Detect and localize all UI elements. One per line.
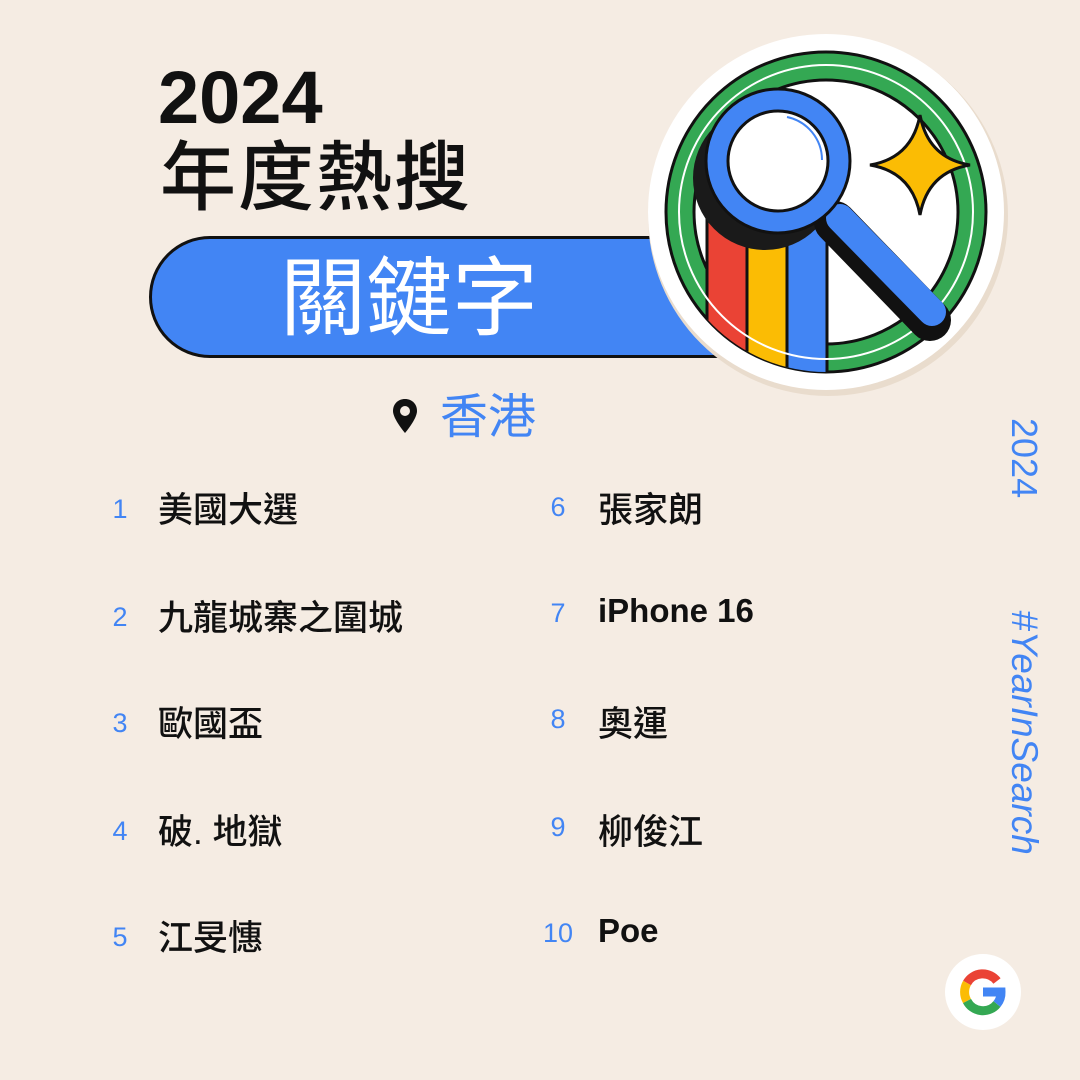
title: 年度熱搜: 年度熱搜 [160,136,472,221]
list column 1: 歐國盃 [158,705,263,744]
list column 2: 張家朗 [598,491,703,530]
list column 2 [543,491,754,949]
location: 香港 [393,391,536,444]
pill banner: 關鍵字 [149,236,789,358]
list column 2: 8 [550,704,566,734]
icon: map pin [393,399,417,433]
vertical text: #YearInSearch: #YearInSearch [1004,610,1045,855]
list column 2: iPhone 16 [598,592,754,629]
banner text: 關鍵字 [280,251,538,347]
list column 2: 柳俊江 [598,813,703,852]
list column 1 [112,491,403,958]
icon: Google G logo [945,954,1021,1030]
list column 1: 4 [112,816,128,846]
star [870,115,970,215]
list column 2: 6 [550,492,566,522]
list column 2: 奧運 [598,705,668,744]
list column 2: 9 [550,812,566,842]
list column 2: 10 [543,918,573,948]
location: 香港: 香港 [440,391,536,444]
list column 1: 江旻憓 [158,919,263,958]
list column 1: 3 [112,708,128,738]
list column 1: 破. 地獄 [158,813,282,852]
list column 1: 5 [112,922,128,952]
list column 1: 1 [112,494,128,524]
vertical text: 2024: 2024 [1004,418,1045,498]
list column 1: 九龍城寨之圍城 [158,599,403,638]
illustration: magnifier badge [648,34,1008,396]
list column 2: Poe [598,912,659,949]
list column 1: 2 [112,602,128,632]
list column 1: 美國大選 [158,491,298,530]
title: 2024: 2024 [158,56,323,139]
magnifier [693,106,837,250]
list column 2: 7 [550,598,566,628]
